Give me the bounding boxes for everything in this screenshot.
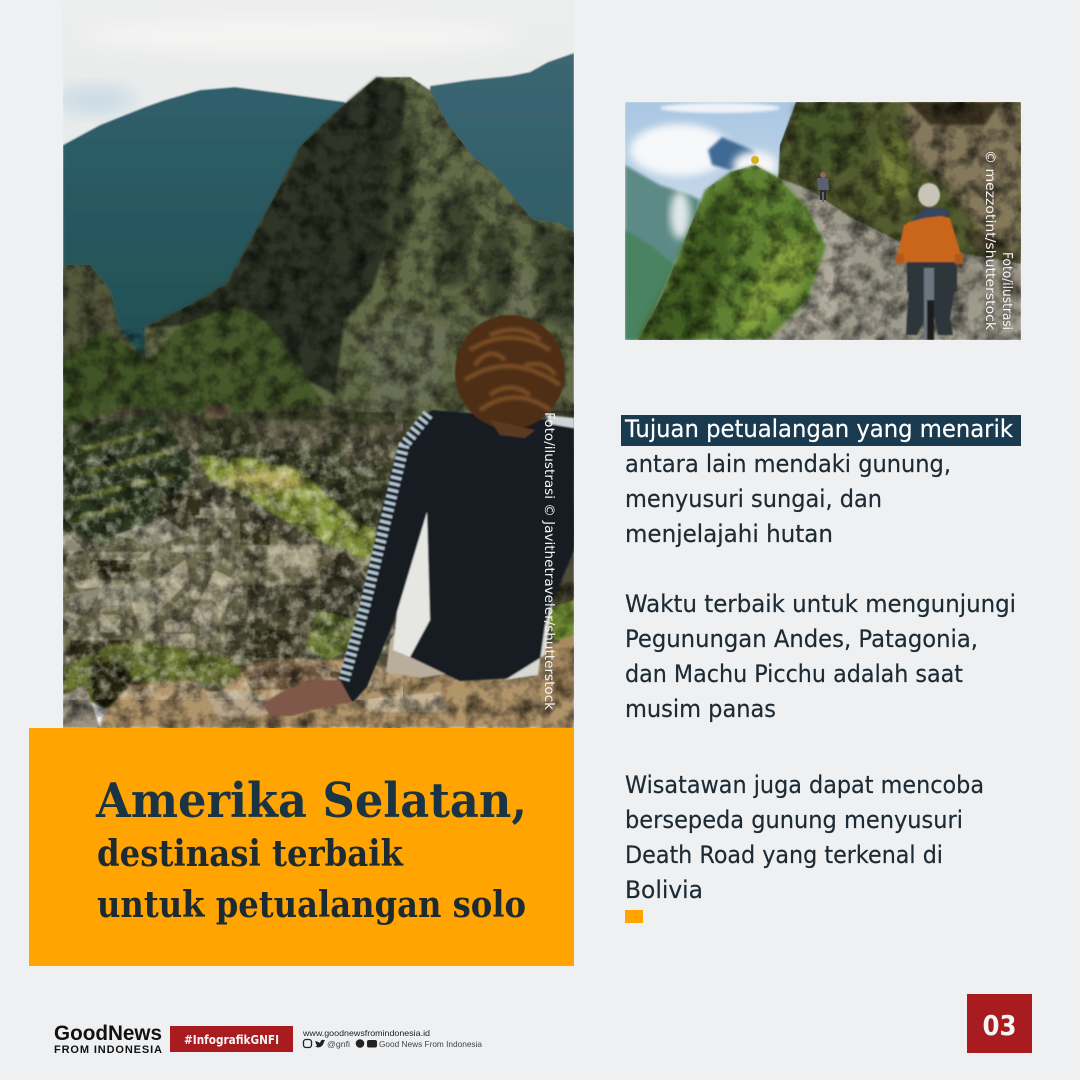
hashtag badge — [170, 1026, 293, 1052]
photo credit: secondary photo: © mezzotint/shutterstock — [982, 150, 998, 330]
icon: instagram — [304, 1040, 312, 1048]
icon: facebook — [356, 1039, 364, 1048]
page number badge — [967, 994, 1032, 1053]
text block: Death Road — [625, 771, 984, 904]
subtitle — [97, 833, 526, 926]
rock ledge foreground — [63, 685, 100, 728]
page number badge: 03 — [982, 1009, 1016, 1042]
main photo: hiker overlooking Machu Picchu — [55, 0, 574, 728]
icon: youtube — [367, 1040, 377, 1048]
text block: adventure destinations — [621, 415, 1021, 548]
text block: adventure destinations: Tujuan petualangan yang menarik — [624, 415, 1013, 443]
texture overlay — [63, 70, 574, 728]
hillside — [638, 165, 826, 340]
text block: best time to visit: Pegunungan Andes, Patagonia, — [625, 625, 978, 653]
secondary photo: cyclists on Death Road — [625, 102, 1021, 340]
text block: Death Road: Wisatawan juga dapat mencoba — [625, 771, 984, 799]
photo credit: main photo: Foto/ilustrasi © Javithetraveler/shutterstock — [541, 412, 557, 710]
text block: Death Road: bersepeda gunung menyusuri — [625, 806, 963, 834]
text block: best time to visit: dan Machu Picchu adalah saat — [625, 660, 963, 688]
hiker figure — [263, 315, 574, 716]
social links — [302, 1028, 482, 1049]
social links: Good News From Indonesia — [379, 1039, 482, 1049]
road — [766, 178, 1021, 340]
photo credit: secondary photo — [985, 152, 1013, 330]
subtitle: destinasi terbaik — [97, 833, 404, 875]
text block: adventure destinations: menjelajahi hutan — [625, 520, 833, 548]
logo: GoodNews From Indonesia: FROM INDONESIA — [54, 1044, 162, 1056]
far cyclist — [817, 172, 829, 202]
social links: @gnfi — [327, 1039, 350, 1049]
logo: GoodNews From Indonesia: GoodNews — [54, 1022, 162, 1045]
text block: best time to visit — [625, 590, 1016, 723]
panel: title box — [29, 728, 574, 966]
social links: www.goodnewsfromindonesia.id — [302, 1028, 430, 1038]
road sign — [751, 156, 759, 164]
text block: Death Road: Bolivia — [625, 876, 703, 904]
text block: best time to visit: musim panas — [625, 695, 776, 723]
text block: adventure destinations: menyusuri sungai, dan — [625, 485, 882, 513]
subtitle: untuk petualangan solo — [97, 884, 526, 926]
text block: best time to visit: Waktu terbaik untuk mengunjungi — [625, 590, 1016, 618]
near cyclist — [896, 183, 963, 340]
icon: twitter — [315, 1040, 325, 1048]
cliff wall — [778, 102, 1021, 264]
hashtag badge: #InfografikGNFI — [184, 1032, 279, 1047]
logo: GoodNews From Indonesia — [54, 1022, 162, 1056]
text block: adventure destinations: antara lain mendaki gunung, — [625, 450, 951, 478]
end marker — [625, 910, 643, 923]
ruins ground — [63, 405, 574, 695]
photo credit: secondary photo: Foto/ilustrasi — [999, 252, 1014, 330]
texture overlay: secondary photo — [625, 102, 1021, 340]
text block: Death Road: Death Road yang terkenal di — [625, 841, 943, 869]
title heading: Amerika Selatan, — [95, 773, 527, 829]
